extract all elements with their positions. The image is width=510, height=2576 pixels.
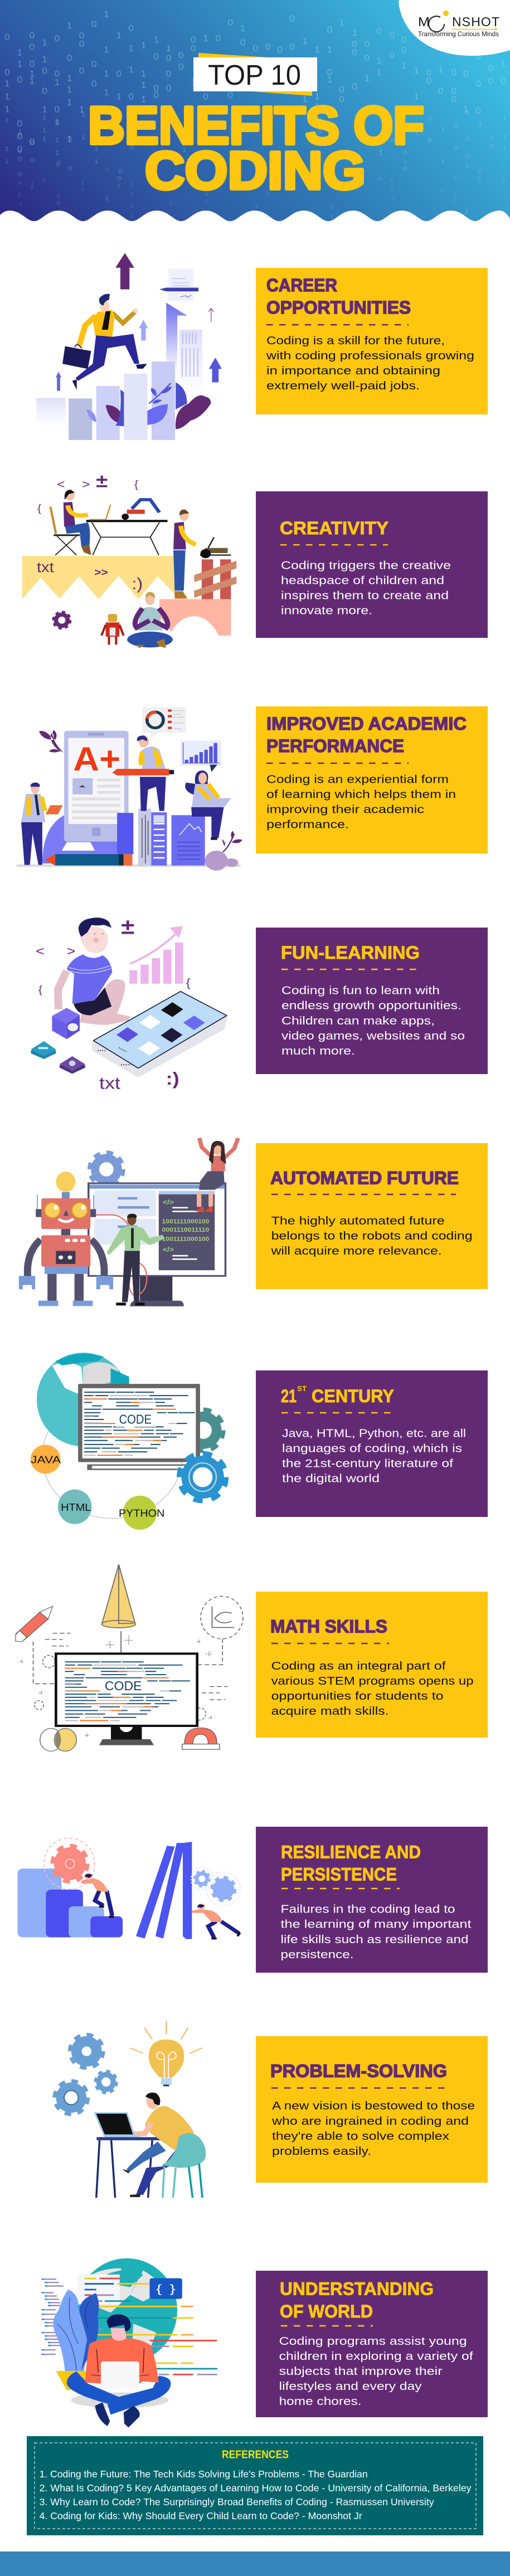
- panel: problem-solving: [256, 2036, 488, 2183]
- symbols: ±: [96, 470, 108, 491]
- protractor and monitor base: [42, 814, 119, 863]
- body text: headspace of children and: [281, 575, 444, 587]
- books: [117, 809, 205, 866]
- body text: innovate more.: [281, 605, 372, 617]
- yellow accent behind top 10: [198, 53, 312, 96]
- binary code rain: 0: [277, 45, 283, 55]
- logo badge: M: [418, 14, 430, 29]
- binary code rain: 100100111000: [5, 142, 494, 175]
- man at laptop: [95, 2092, 194, 2197]
- small arrows: [56, 309, 222, 391]
- heading: IMPROVED ACADEMIC: [266, 714, 467, 734]
- code panel text: 1001111000100: [162, 1218, 210, 1225]
- binary code rain: 0110: [129, 24, 134, 101]
- body text: improving their academic: [266, 804, 424, 816]
- center person with pen: [112, 735, 174, 811]
- heading: [280, 2279, 434, 2321]
- body text: [266, 774, 456, 831]
- body text: [270, 1215, 473, 1257]
- binary code rain: 011: [376, 27, 382, 77]
- body text: extremely well-paid jobs.: [266, 380, 420, 392]
- body text: the digital world: [282, 1473, 380, 1485]
- binary code rain: 10010: [130, 211, 468, 220]
- panel: references: [27, 2436, 483, 2535]
- body text: [281, 1904, 472, 1961]
- symbols: >>: [94, 567, 108, 578]
- symbols: :): [166, 1069, 179, 1089]
- body text: Coding triggers the creative: [281, 559, 451, 572]
- laptop screen with code: CODE: [119, 1412, 152, 1427]
- body text: opportunities for students to: [271, 1690, 444, 1702]
- body text: Coding is an experiential form: [266, 774, 449, 786]
- body text: [271, 2100, 475, 2158]
- man pushing gear: [81, 1873, 114, 1917]
- heading: [266, 275, 411, 318]
- protractor: [182, 1728, 220, 1749]
- binary code rain: 0001: [79, 31, 85, 114]
- header banner: [0, 0, 510, 221]
- binary code rain: 1111: [141, 41, 146, 104]
- body text: in importance and obtaining: [266, 365, 440, 377]
- binary code rain: 11: [302, 37, 308, 104]
- steps: [18, 1868, 123, 1938]
- binary code rain: 10: [203, 34, 208, 101]
- symbols: <: [57, 477, 65, 491]
- body text: belongs to the robots and coding: [271, 1230, 473, 1242]
- body text: Coding as an integral part of: [271, 1660, 446, 1672]
- salmon gear: [44, 1838, 95, 1889]
- body text: of learning which helps them in: [266, 789, 456, 801]
- globe: [37, 1353, 129, 1446]
- body text: endless growth opportunities.: [281, 1000, 462, 1012]
- meditating person: [127, 592, 173, 648]
- binary code rain: 0111010101: [18, 122, 507, 152]
- binary code rain: 1011010100101: [18, 178, 493, 203]
- panel: improved academic performance: [256, 706, 488, 853]
- binary code rain: 110101010111: [5, 109, 507, 135]
- globe: [76, 2258, 177, 2363]
- references list: 1. Coding the Future: The Tech Kids Solving Life's Problems - The Guardian: [40, 2468, 368, 2480]
- binary code rain: 0: [252, 44, 258, 53]
- desktop monitor: CODE: [105, 1679, 142, 1694]
- logo badge: Jr: [494, 27, 497, 31]
- binary code rain: 000: [91, 19, 97, 89]
- seated person: [64, 490, 91, 555]
- person with laptop: [67, 2314, 171, 2427]
- floor: [16, 865, 241, 867]
- binary code rain: 000: [451, 68, 456, 104]
- coloured code lines: [85, 2279, 217, 2374]
- little red robot: [101, 614, 124, 645]
- code window: [77, 2275, 120, 2305]
- illustration: academic performance: [16, 707, 242, 871]
- body text: inspires them to create and: [281, 589, 449, 602]
- body text: the 21st-century literature of: [282, 1458, 454, 1470]
- binary code rain: 001: [401, 35, 407, 70]
- leaves: [86, 382, 211, 429]
- binary code rain: 1000: [153, 35, 159, 100]
- panel: resilience and persistence: [256, 1827, 488, 1973]
- heading: ST: [297, 1384, 307, 1393]
- teal chair: [161, 2133, 206, 2198]
- braces badge: [149, 2279, 182, 2299]
- illustration: kid with phone: [31, 914, 228, 1092]
- panel: math skills: [256, 1592, 488, 1738]
- references list: [40, 2468, 472, 2521]
- binary code rain: 000: [475, 52, 481, 116]
- panel: creativity: [256, 491, 488, 638]
- pencil: [16, 1606, 53, 1642]
- binary code rain: 011010101010: [18, 167, 506, 189]
- java bubble: [31, 1445, 61, 1474]
- left man: [21, 783, 63, 865]
- phone with grade: [64, 731, 129, 842]
- binary code rain: 000110: [30, 31, 35, 147]
- heading: [281, 1842, 421, 1884]
- references list: 2. What Is Coding? 5 Key Advantages of Learning How to Code - University of California, Berkeley: [40, 2482, 472, 2494]
- binary code rain: 00: [390, 31, 395, 60]
- app tiles: [116, 1002, 205, 1055]
- binary code rain: 0010100110: [18, 145, 482, 182]
- heading: PERFORMANCE: [266, 736, 404, 756]
- standing person: [173, 510, 196, 598]
- binary code rain: 0101: [327, 26, 332, 85]
- illustration: creativity workshop: [22, 470, 236, 648]
- main title: [88, 96, 424, 201]
- bars: [69, 362, 175, 440]
- gears: [184, 1410, 223, 1450]
- symbols: txt: [37, 559, 54, 575]
- heading: PERSISTENCE: [281, 1864, 397, 1884]
- panel: career opportunities: [256, 268, 488, 414]
- symbols: :): [132, 575, 143, 593]
- heading: [266, 714, 467, 756]
- binary code rain: 001: [365, 40, 370, 83]
- plant: [205, 831, 242, 871]
- body text: acquire math skills.: [271, 1705, 389, 1718]
- braces badge: }: [170, 2282, 176, 2295]
- binary code rain: 10011100101: [20, 195, 468, 213]
- illustration: problem solving: [55, 2021, 206, 2198]
- panel: understanding of world: [256, 2271, 488, 2417]
- symbols: [37, 470, 143, 593]
- woman sitting on monitor: [195, 1138, 238, 1213]
- body text: the learning of many important: [281, 1919, 472, 1931]
- small car robot: [200, 537, 231, 558]
- symbols: ±: [121, 914, 134, 939]
- logo badge: Transforming Curious Minds: [418, 30, 499, 38]
- desktop monitor: [56, 1653, 197, 1745]
- binary code rain: 1111: [104, 10, 109, 97]
- body text: home chores.: [279, 2396, 362, 2408]
- icon: document and pen: [159, 269, 198, 301]
- illustration: career climbing man: [36, 253, 222, 440]
- references heading: REFERENCES: [222, 2449, 289, 2461]
- symbols: txt: [99, 1074, 120, 1092]
- binary code rain: 110000: [17, 48, 22, 154]
- symbols: {: [37, 503, 42, 514]
- heading: AUTOMATED FUTURE: [270, 1168, 459, 1188]
- illustration: math skills: [16, 1564, 243, 1751]
- symbols: <: [36, 944, 45, 958]
- code panel text: [162, 1198, 210, 1253]
- symbols: {: [134, 479, 138, 490]
- heading: OF WORLD: [280, 2301, 373, 2321]
- binary code rain: 0: [265, 42, 270, 52]
- references list: 4. Coding for Kids: Why Should Every Child Learn to Code? - Moonshot Jr: [40, 2510, 362, 2521]
- binary code rain: 11: [414, 67, 419, 101]
- heading: MATH SKILLS: [270, 1617, 387, 1637]
- body text: problems easily.: [272, 2145, 371, 2158]
- logo badge: NSHOT: [452, 14, 499, 29]
- body text: various STEM programs opens up: [271, 1675, 474, 1687]
- kid: [58, 918, 130, 1025]
- body text: will acquire more relevance.: [270, 1245, 442, 1257]
- binary code rain: 00: [426, 68, 431, 86]
- symbols: >: [67, 944, 75, 958]
- body text: persistence.: [281, 1949, 353, 1961]
- body text: The highly automated future: [271, 1215, 445, 1227]
- binary code rain: 11001: [42, 38, 47, 114]
- body text: languages of coding, which is: [282, 1443, 462, 1455]
- red wire: [93, 1215, 147, 1295]
- desk: [96, 2137, 163, 2198]
- body text: life skills such as resilience and: [281, 1934, 468, 1946]
- body text: [279, 2335, 473, 2408]
- seated woman: [185, 770, 231, 840]
- body text: [282, 1428, 466, 1485]
- binary code rain: 10: [501, 60, 506, 86]
- binary code rain: 111: [314, 45, 320, 111]
- heading: [281, 1384, 394, 1406]
- binary code rain: 1000: [166, 44, 171, 93]
- body text: Coding is fun to learn with: [281, 985, 440, 997]
- laptop and robot arm: [89, 500, 159, 520]
- hash sign: [194, 559, 236, 599]
- phone with grade: A+: [73, 740, 120, 778]
- body text: Children can make apps,: [281, 1015, 435, 1027]
- main title: BENEFITS OF: [88, 96, 424, 155]
- body text: with coding professionals growing: [266, 350, 474, 362]
- heading: CAREER: [266, 275, 337, 295]
- pink growth chart: [129, 926, 183, 984]
- body text: Coding programs assist young: [279, 2335, 467, 2348]
- running man: [62, 294, 147, 390]
- dashed connectors: [33, 1633, 228, 1700]
- body text: video games, websites and so: [281, 1030, 465, 1042]
- binary code rain: [4, 10, 507, 220]
- gears: [55, 2035, 116, 2114]
- symbols: >: [82, 477, 90, 491]
- header gradient background with wavy bottom edge: [0, 0, 510, 221]
- binary code rain: 101111: [67, 21, 72, 144]
- graph bubble: [201, 1596, 243, 1639]
- heading: PROBLEM-SOLVING: [270, 2061, 447, 2081]
- pink bridge: [159, 599, 231, 636]
- bar chart card: [181, 741, 221, 772]
- binary code rain: 101: [116, 31, 122, 101]
- heading: OPPORTUNITIES: [266, 297, 411, 318]
- footer band: [0, 2551, 510, 2576]
- speech bubble with donut chart: [143, 707, 186, 739]
- binary code rain: 00: [488, 64, 493, 86]
- html bubble: HTML: [61, 1502, 91, 1514]
- braces badge: {: [156, 2282, 162, 2295]
- blue gears: [191, 1867, 240, 1906]
- body text: Java, HTML, Python, etc. are all: [282, 1428, 466, 1440]
- body text: A new vision is bestowed to those: [272, 2100, 475, 2112]
- binary code rain: 100: [339, 18, 344, 104]
- binary code rain: 1000: [352, 28, 357, 91]
- falling planks: [136, 1842, 192, 1939]
- symbols: {: [38, 984, 42, 996]
- gear icon: [53, 612, 70, 628]
- body text: much more.: [281, 1045, 355, 1057]
- binary code rain: 00: [289, 14, 295, 52]
- smartphone: [92, 991, 228, 1077]
- python bubble: [119, 1496, 164, 1530]
- binary code rain: 00101: [54, 34, 60, 127]
- symbols: [36, 914, 191, 1092]
- cube: [52, 1008, 80, 1039]
- binary code rain: 10: [438, 65, 444, 96]
- body text: children in exploring a variety of: [279, 2350, 473, 2363]
- symbols: {: [186, 976, 191, 989]
- laptop screen with code: [78, 1384, 200, 1470]
- code panel text: 0001110011110: [162, 1226, 210, 1233]
- heading: 21: [281, 1386, 297, 1406]
- body text: [281, 559, 451, 617]
- binary code rain: 00: [228, 18, 233, 100]
- code panel text: </>: [163, 1198, 174, 1206]
- illustration: understanding of world: [42, 2258, 217, 2427]
- panel: 21st century: [256, 1370, 488, 1517]
- heading: CREATIVITY: [280, 518, 388, 538]
- binary code rain: 00: [178, 51, 184, 72]
- small tiles: [31, 1041, 85, 1074]
- plant: [53, 2289, 99, 2390]
- body text: Coding is a skill for the future,: [266, 335, 445, 347]
- code panel text: </>: [163, 1246, 174, 1253]
- pencil: [45, 854, 133, 866]
- main title: CODING: [145, 141, 366, 201]
- binary code rain: 01: [463, 70, 469, 114]
- monitor: [89, 1183, 225, 1306]
- binary code rain: 100110100010: [5, 129, 507, 157]
- leaf branch: [39, 730, 64, 753]
- towers: [36, 303, 202, 426]
- binary code rain: 00111: [4, 32, 10, 114]
- body text: they're able to solve complex: [272, 2130, 449, 2143]
- panel: automated future: [256, 1143, 488, 1289]
- illustration: resilience: [18, 1838, 240, 1939]
- code panel text: 1001111000100: [162, 1235, 210, 1242]
- binary code rain: 10: [240, 24, 245, 47]
- references list: 3. Why Learn to Code? The Surprisingly Broad Benefits of Coding - Rasmussen University: [40, 2496, 434, 2507]
- illustration: 21st century languages: [31, 1353, 226, 1530]
- man pushing plank: [192, 1904, 240, 1939]
- man presenting: [106, 1214, 164, 1304]
- robot: [19, 1172, 113, 1306]
- logo badge: [399, 0, 510, 56]
- body text: [271, 1660, 474, 1718]
- left side code marks: [42, 2279, 64, 2354]
- html bubble: [58, 1489, 92, 1524]
- body text: [266, 335, 474, 392]
- light bulb: [130, 2021, 202, 2086]
- body text: [281, 985, 465, 1057]
- body text: subjects that improve their: [279, 2365, 443, 2378]
- table and chair: [50, 507, 168, 555]
- binary code rain: 0: [215, 34, 221, 43]
- java bubble: JAVA: [31, 1455, 61, 1466]
- icon: big purple arrow: [115, 253, 134, 289]
- panel: fun-learning: [256, 928, 488, 1074]
- binary code rain: 001: [191, 35, 196, 87]
- yellow zigzag platform: [22, 556, 176, 599]
- orbit ring: [42, 1394, 182, 1519]
- illustration: automated future: [19, 1138, 238, 1306]
- heading: UNDERSTANDING: [280, 2279, 434, 2299]
- heading: RESILIENCE AND: [281, 1842, 421, 1862]
- body text: performance.: [266, 819, 349, 831]
- python bubble: PYTHON: [119, 1508, 164, 1519]
- body text: who are ingrained in coding and: [271, 2115, 469, 2128]
- top 10 label: TOP 10: [208, 59, 301, 91]
- body text: Failures in the coding lead to: [281, 1904, 455, 1916]
- blue gear: [179, 1454, 226, 1500]
- venn diagram: [40, 1729, 76, 1751]
- heading: FUN-LEARNING: [281, 943, 420, 963]
- cone: [102, 1564, 135, 1653]
- gear: [90, 1153, 123, 1186]
- body text: lifestyles and every day: [279, 2380, 422, 2393]
- heading: CENTURY: [312, 1386, 394, 1406]
